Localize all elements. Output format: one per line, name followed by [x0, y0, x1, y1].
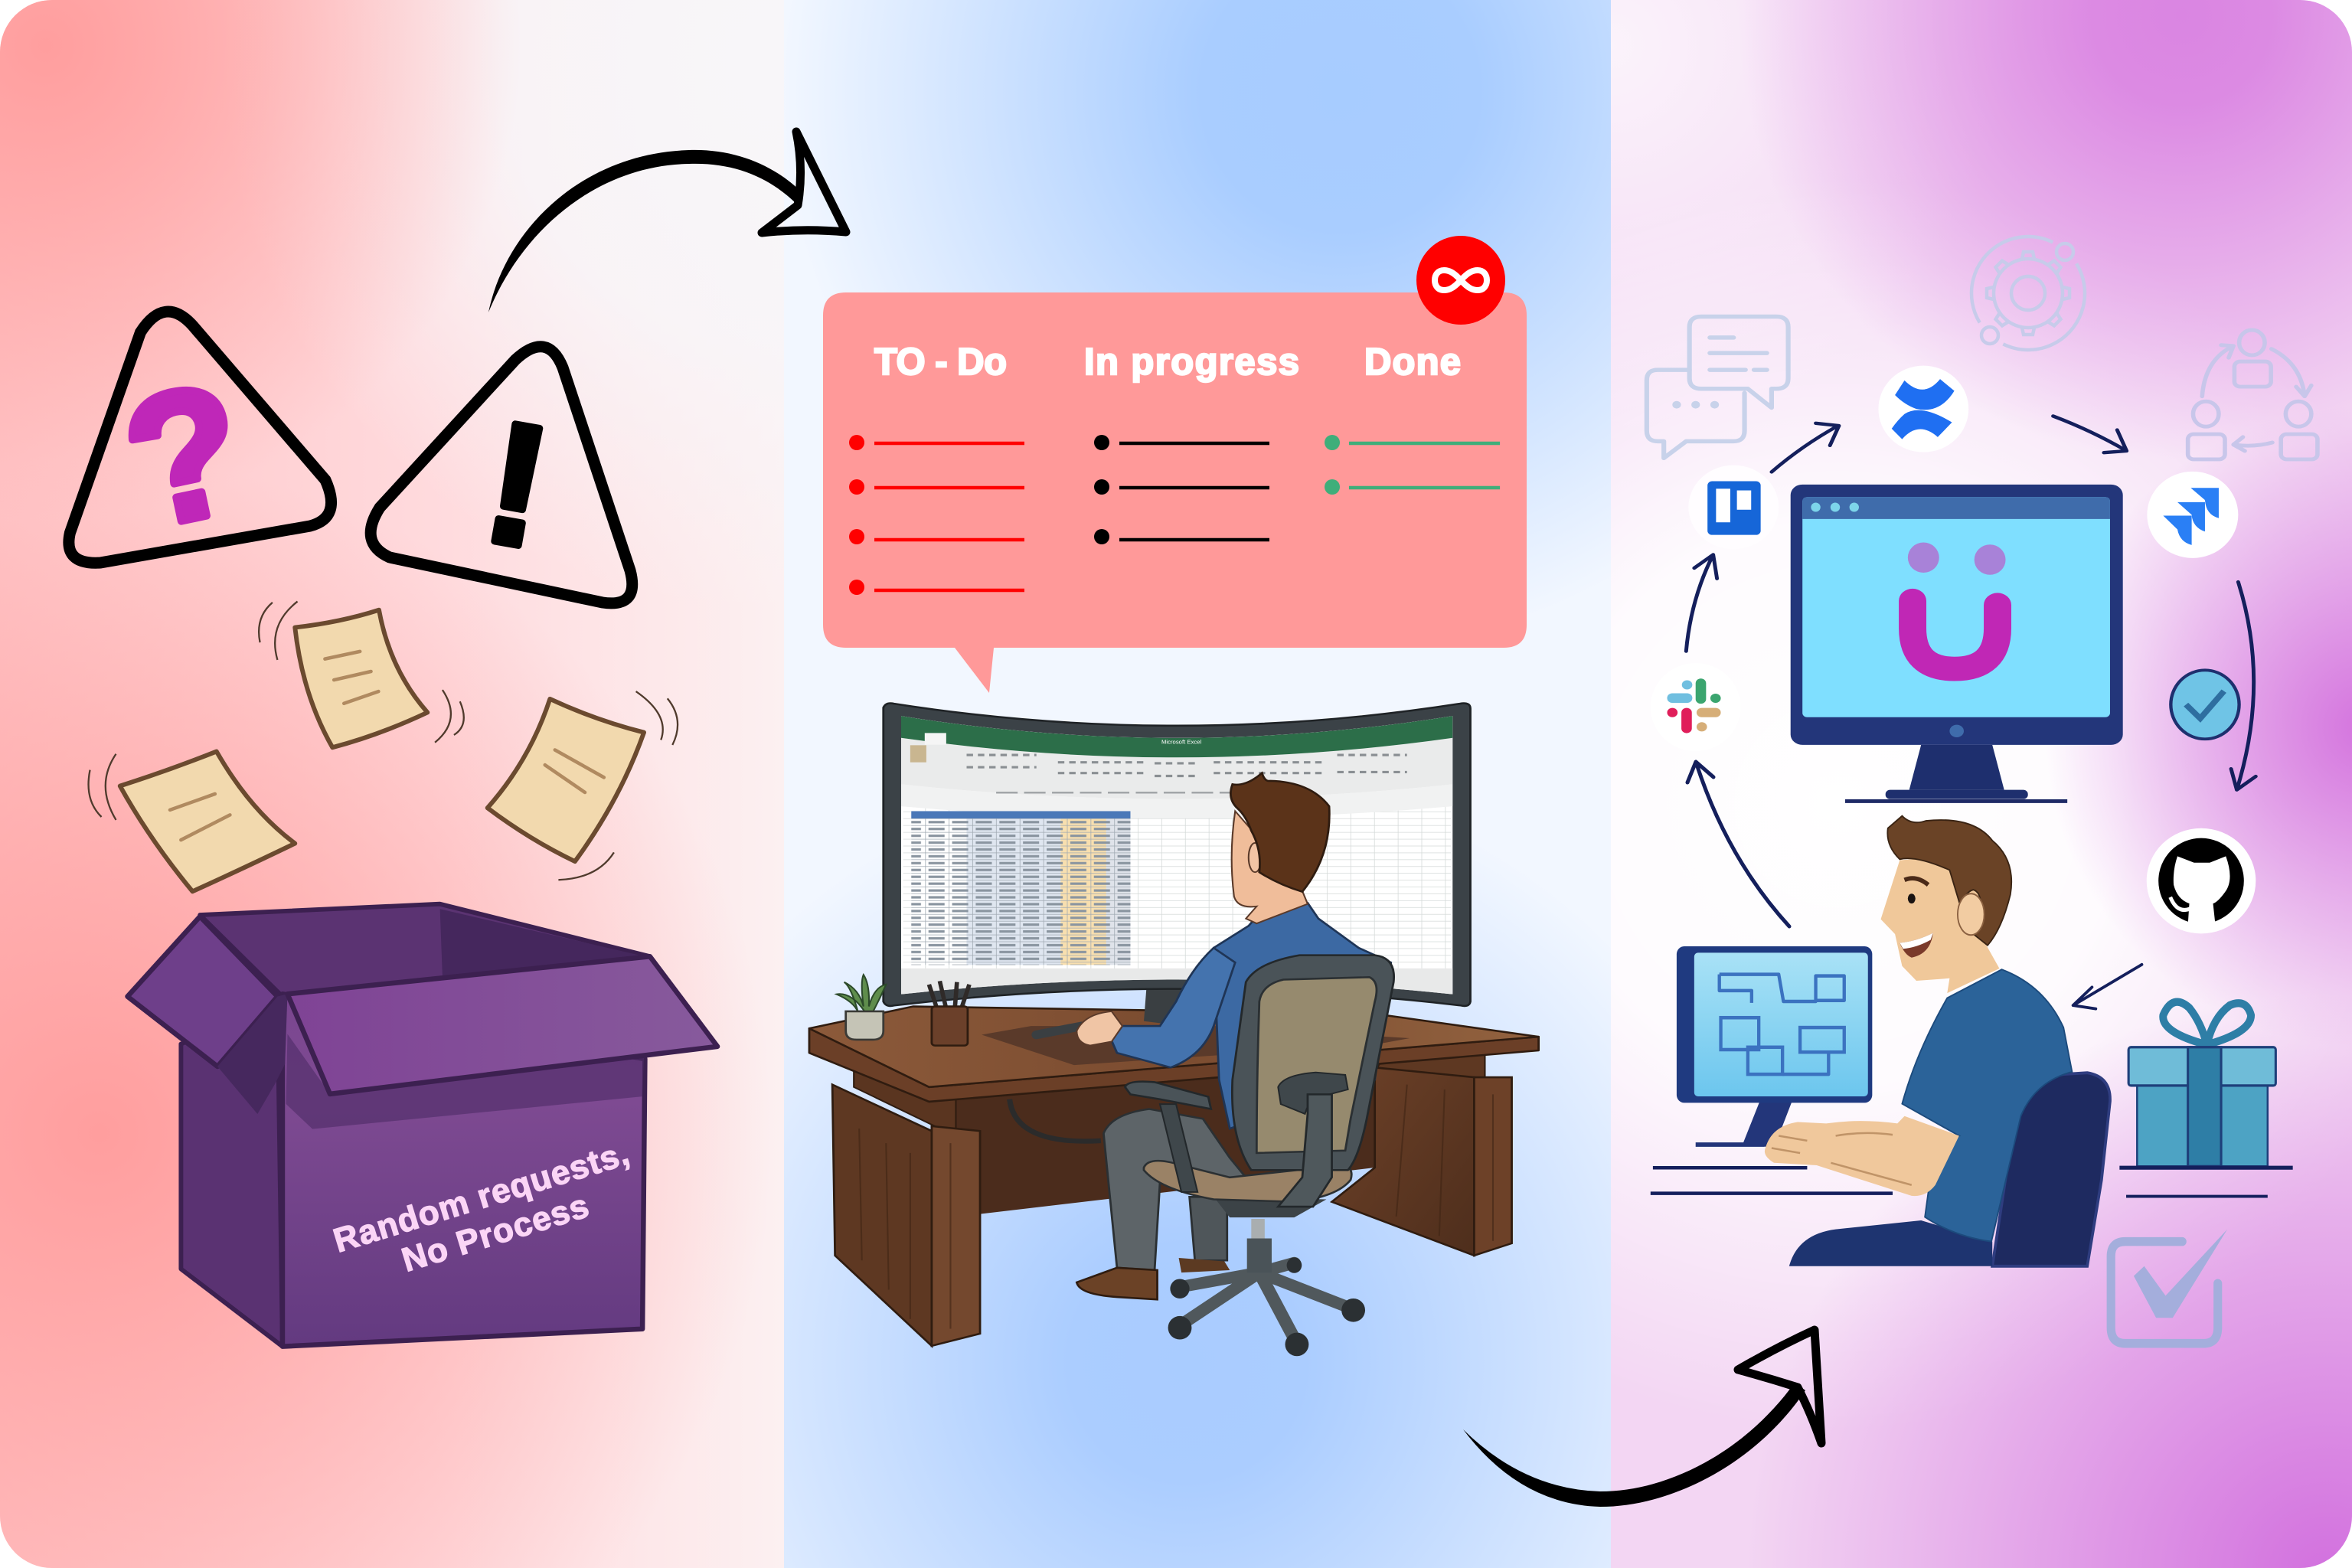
heading: in progress: In progress: [1084, 341, 1299, 383]
workflow lower group: [1651, 816, 2293, 1344]
arrow: spreadsheet to workflow: [1463, 1330, 1821, 1507]
arrow: GitHub to developer: [2073, 965, 2142, 1009]
desk legs and back panel: [832, 1053, 1512, 1346]
badge: Jira: [2147, 472, 2238, 558]
text: box label: No Process: [397, 1187, 594, 1279]
curved monitor: [884, 703, 1471, 1006]
list: in-progress items: [1094, 435, 1269, 544]
icon: exclamation warning triangle: [371, 347, 632, 603]
man: [1037, 773, 1391, 1299]
pencil cup: [929, 981, 969, 1046]
plant: [837, 975, 886, 1040]
icon: gift box: [2119, 1002, 2293, 1197]
icon: falling papers: [89, 602, 678, 891]
heading: to-do: TO - Do: [874, 341, 1007, 383]
icon: faded team cycle: [2188, 330, 2318, 459]
arrows: workflow cycle upper: [1686, 416, 2256, 790]
badge: GitHub: [2147, 828, 2256, 933]
icon: faded checkbox: [2111, 1230, 2227, 1344]
icon: check badge: [2171, 670, 2239, 739]
small developer monitor: [1651, 946, 1893, 1194]
illustration: open purple box: [128, 904, 717, 1347]
icon: exclamation warning triangle: !: [472, 384, 563, 585]
icon: infinity badge: [1416, 236, 1505, 325]
panel: connected workflow background: [1611, 0, 2352, 1568]
desk top: [809, 987, 1539, 1102]
badge: Trello: [1688, 466, 1779, 549]
icon: faded chat bubbles: [1647, 316, 1788, 458]
panel: chaos background: [0, 0, 784, 1568]
paper: left sheet: [89, 751, 295, 891]
heading: done: Done: [1364, 341, 1461, 383]
text: box label: Random requests,: [329, 1134, 634, 1260]
office chair: [1125, 956, 1394, 1356]
badge: Confluence: [1878, 366, 1968, 452]
paper: centre sheet: [259, 602, 464, 747]
curved monitor: Microsoft Excel: [1161, 739, 1202, 745]
icon: question warning triangle: [69, 312, 332, 567]
illustration: man at desk with curved spreadsheet monitor: [809, 703, 1539, 1356]
happy developer: [1765, 816, 2110, 1266]
icon: question warning triangle: ?: [108, 344, 261, 567]
paper: right sheet: [488, 691, 678, 880]
workflow upper group: [1647, 316, 2318, 801]
arrow: chaos to spreadsheet: [488, 132, 846, 312]
list: done items: [1325, 435, 1500, 495]
callout: kanban board: [823, 292, 1527, 693]
badge: Slack: [1651, 663, 1741, 751]
list: to-do items: [849, 435, 1024, 595]
panel: spreadsheet background: [784, 0, 1611, 1568]
arrow: developer back to Slack: [1687, 762, 1789, 926]
main monitor with smile logo: [1791, 485, 2123, 801]
icon: faded gear: [1950, 215, 2106, 371]
